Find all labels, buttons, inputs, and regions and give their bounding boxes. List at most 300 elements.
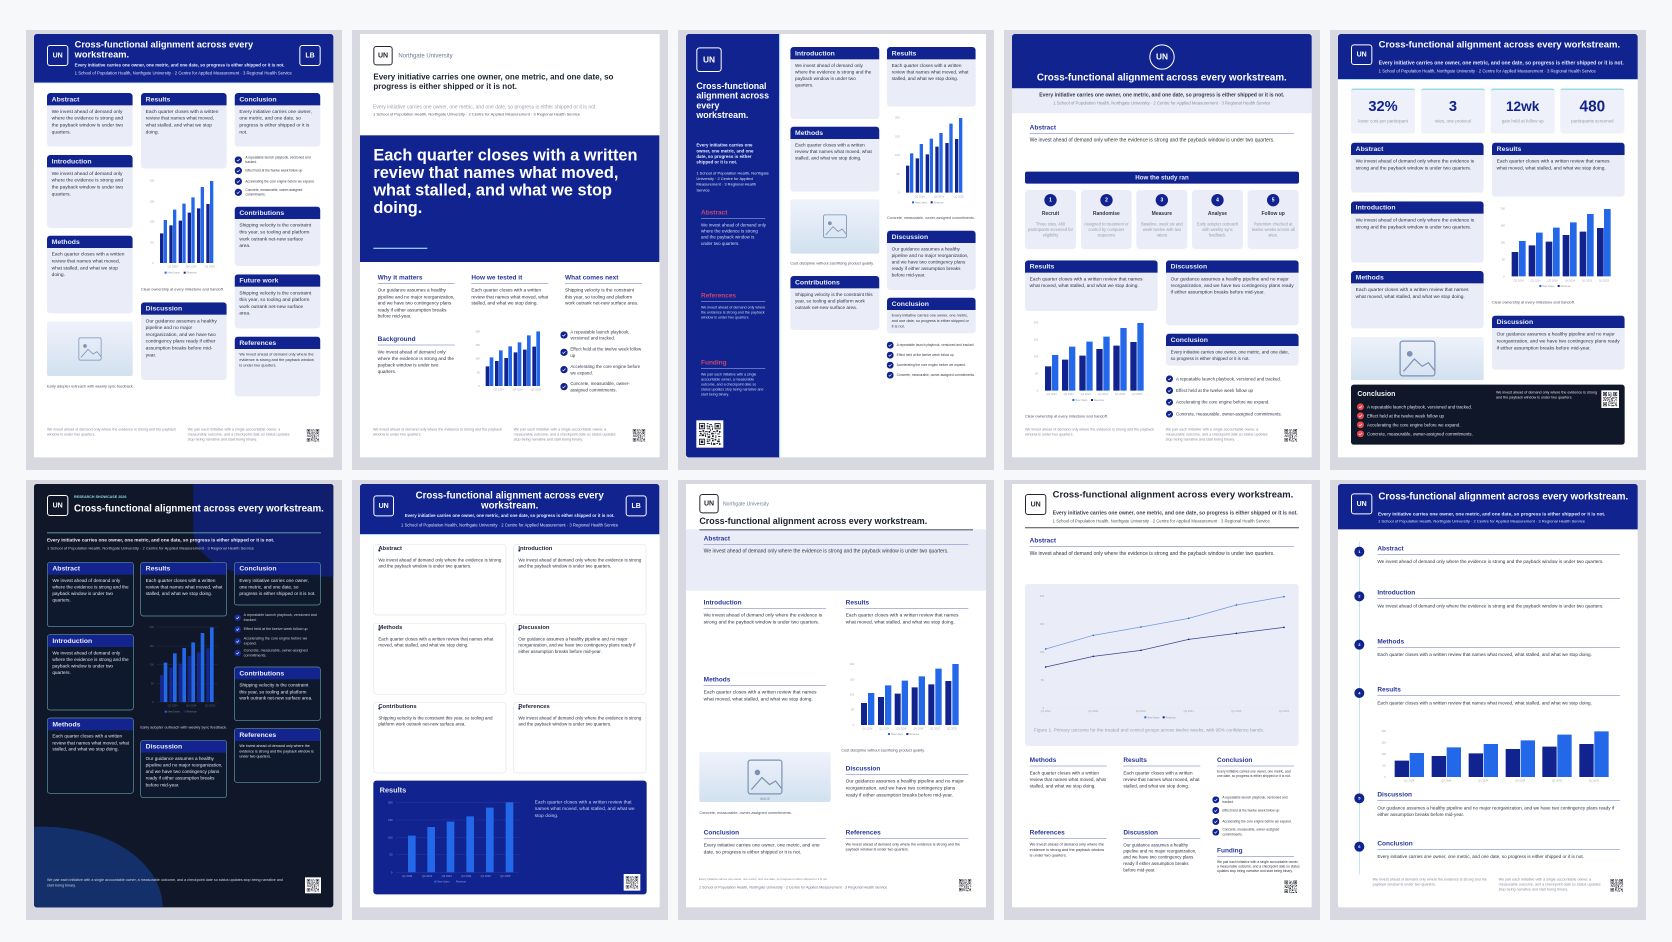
bar chart: Revenue bbox=[187, 711, 197, 714]
panel: Discussion: assumption breaks before mid- bbox=[146, 346, 212, 351]
section: Abstract: We invest ahead of demand only where the evidence is strong and the payback window is under two quarters. bbox=[1030, 551, 1275, 556]
checklist: Concrete, measurable, owner-assigned commitments. bbox=[1176, 411, 1282, 416]
panel: Discussion: Our guidance assumes a healthy bbox=[146, 318, 217, 324]
poster 3: navy sidebar bbox=[678, 30, 994, 470]
step 2: Randomise: Randomise bbox=[1093, 211, 1120, 216]
section: Background: quarters. bbox=[378, 369, 396, 374]
step 3: Measure: week twelve with two bbox=[1143, 227, 1181, 232]
section: Conclusion: Conclusion bbox=[1377, 840, 1413, 847]
section: Funding: accountable owner, a measurable bbox=[701, 377, 754, 381]
title: workstream. bbox=[696, 110, 748, 120]
bar chart: Q4 2024 bbox=[1565, 278, 1576, 282]
section: Discussion bbox=[846, 765, 968, 799]
poster 2: statement banner bbox=[352, 30, 668, 470]
caption: Clear ownership at every milestone and handoff. bbox=[1492, 300, 1575, 305]
section: What comes next: work outrank net-new surface area. bbox=[565, 300, 638, 306]
step 4: Analyse: 4 bbox=[1216, 197, 1219, 203]
section: How we tested it: review that names what moved, what bbox=[471, 294, 548, 299]
affiliations: 1 School of Population Health, Northgate University · 2 Centre for Applied Measurement · 3 Regional Health Service bbox=[47, 546, 254, 550]
logo UN bbox=[373, 495, 394, 516]
panel: Discussion: Our guidance assumes a healthy bbox=[892, 246, 960, 252]
checklist: Effect held at the twelve week follow up bbox=[897, 353, 954, 357]
bar chart: Revenue bbox=[1094, 399, 1105, 402]
header band bbox=[1338, 34, 1638, 80]
checklist: Accelerating the core engine before we bbox=[244, 636, 307, 640]
abstract band bbox=[686, 529, 986, 591]
bar chart: 0 bbox=[1503, 274, 1505, 278]
marker 4 bbox=[1354, 688, 1364, 698]
checklist: versioned and tracked. bbox=[570, 336, 615, 341]
section: Results bbox=[846, 599, 968, 627]
poster 1: three-column with twin logos bbox=[26, 30, 342, 470]
panel: Contributions: this year, so tooling and platform bbox=[239, 229, 309, 235]
panel: Methods: Methods bbox=[1356, 273, 1384, 281]
section: References: We invest ahead of demand only where the bbox=[1030, 842, 1104, 846]
panel: Discussion: pipeline and no major reorganization, bbox=[146, 762, 222, 768]
panel: Methods: what stalled, and what we stop bbox=[52, 265, 118, 271]
section: Discussion: pipeline and no major reorganization, bbox=[1123, 849, 1196, 854]
step 2: Randomise bbox=[1081, 190, 1132, 249]
checklist: Accelerating the core engine before we expand. bbox=[897, 363, 966, 367]
footer note bbox=[1496, 391, 1597, 400]
bar chart: 150 bbox=[475, 343, 480, 347]
panel: Discussion: ready if either assumption breaks bbox=[146, 775, 214, 781]
section: Discussion: ready if either assumption breaks bbox=[1123, 861, 1189, 866]
panel: Results: Each quarter closes with a written bbox=[146, 109, 218, 114]
round logo UN: UN bbox=[1156, 52, 1168, 61]
QR code bbox=[624, 874, 640, 891]
marker 1 bbox=[1354, 547, 1364, 557]
section: References bbox=[1030, 829, 1107, 859]
panel: Methods: Methods bbox=[52, 720, 80, 728]
logo UN: UN bbox=[703, 55, 715, 64]
headline: progress is either shipped or it is not. bbox=[373, 82, 517, 91]
panel: Abstract: and the payback window is under two quarters. bbox=[378, 564, 471, 569]
line chart: 150 bbox=[1040, 622, 1045, 626]
bar chart: 50 bbox=[477, 371, 480, 375]
section: References bbox=[701, 292, 766, 320]
bar chart bbox=[895, 115, 964, 204]
QR code bbox=[1284, 429, 1297, 442]
section: Discussion: Our guidance assumes a healthy bbox=[1123, 842, 1188, 847]
heading: Results: Results bbox=[380, 786, 406, 794]
QR code bbox=[696, 420, 723, 448]
panel: Contributions: Contributions bbox=[378, 703, 417, 709]
subtitle: Every initiative carries one owner, one metric, and one date, so progress is either shipped or it is not. bbox=[1378, 512, 1605, 517]
section: Abstract bbox=[1030, 124, 1294, 143]
title: workstream. bbox=[481, 500, 538, 511]
title: Cross-functional bbox=[696, 81, 767, 91]
title: Cross-functional alignment across every workstream. bbox=[699, 516, 927, 526]
panel: Conclusion: Conclusion bbox=[239, 95, 277, 103]
section: References: evidence is strong and the payback window bbox=[1030, 847, 1104, 852]
step 5: Follow up: twelve weeks across all bbox=[1252, 227, 1295, 232]
section: References: References bbox=[1030, 829, 1065, 836]
marker 3 bbox=[1354, 640, 1364, 650]
step 3: Measure bbox=[1136, 190, 1187, 249]
stat: 32%: 32% bbox=[1368, 98, 1398, 114]
bar chart bbox=[1034, 321, 1144, 402]
round logo UN bbox=[1149, 44, 1175, 70]
poster 10: numbered timeline bbox=[1330, 480, 1646, 920]
subtitle: Every initiative carries one owner, one metric, and one date, so progress is either shipped or it is not. bbox=[405, 513, 615, 518]
panel: Introduction: Introduction bbox=[52, 157, 92, 165]
footer note right: We pair each initiative with a single accountable owner, a bbox=[1499, 878, 1591, 882]
bar chart: 0 bbox=[1384, 775, 1386, 779]
panel: Contributions bbox=[790, 276, 879, 330]
title: Cross-functional alignment across every workstream. bbox=[1379, 39, 1620, 50]
panel: Discussion: Discussion bbox=[1497, 318, 1533, 326]
affiliations: 1 School of Population Health, Northgate University · 2 Centre for Applied Measurement · 3 Regional Health Service bbox=[1053, 101, 1270, 106]
footer note left bbox=[1373, 877, 1487, 887]
section: Why it matters: ready if either assumption breaks bbox=[378, 307, 446, 312]
section: Results: Each quarter closes with a written bbox=[1123, 770, 1193, 775]
panel: Contributions: outrank net-new surface area. bbox=[795, 305, 857, 310]
panel: Discussion: reorganization, and we have two contingency plans ready if bbox=[518, 643, 635, 648]
section: Abstract: Abstract bbox=[1030, 124, 1056, 131]
stat: 32% bbox=[1351, 88, 1415, 133]
bar chart: Q2 2024 bbox=[168, 703, 178, 707]
bar chart: Q3 2024 bbox=[1478, 779, 1489, 783]
banner statement: review that names what moved, bbox=[373, 163, 618, 181]
section: Why it matters: and we have two contingency plans bbox=[378, 300, 451, 306]
checklist: Accelerating the core engine before we expand. bbox=[1222, 820, 1292, 823]
panel: Results bbox=[141, 93, 227, 169]
section: Introduction bbox=[1377, 589, 1620, 609]
section: Why it matters: Our guidance assumes a healthy bbox=[378, 287, 446, 293]
poster 8: tinted abstract band bbox=[678, 480, 994, 920]
bar chart: 100 bbox=[150, 220, 155, 224]
panel: Introduction: strong and the payback window is under two quarters. bbox=[1356, 224, 1471, 230]
panel: Contributions: Shipping velocity is the constraint this bbox=[795, 292, 873, 297]
panel: References: and the payback window is under two quarters. bbox=[518, 722, 611, 727]
footer note right: We pair each initiative with a single accountable owner, a bbox=[514, 428, 606, 432]
panel: Future work: Future work bbox=[239, 277, 278, 284]
subtitle: Every initiative carries one owner, one metric, and one date, so progress is either shipped or it is not. bbox=[47, 538, 274, 543]
bar chart: 0 bbox=[152, 261, 154, 265]
logo UN bbox=[1351, 493, 1372, 514]
bar chart: 0 bbox=[478, 384, 480, 388]
section: Abstract: Abstract bbox=[704, 535, 730, 542]
marker 2: 2 bbox=[1358, 594, 1360, 599]
checklist: assigned commitments. bbox=[570, 387, 617, 392]
stat: 12wk: 12wk bbox=[1506, 99, 1539, 114]
logo LB: LB bbox=[305, 51, 315, 59]
checklist: Effect held at the twelve week follow up bbox=[244, 627, 308, 631]
panel: Abstract: where the evidence is strong and bbox=[52, 116, 123, 121]
bar chart: 100 bbox=[1034, 355, 1039, 359]
panel: Methods: stalled, and what we stop doing. bbox=[795, 155, 861, 161]
checklist: Accelerating the core engine before we expand. bbox=[1176, 399, 1270, 404]
rule bbox=[47, 531, 321, 534]
checklist: tracked. bbox=[1222, 800, 1234, 804]
section: Methods bbox=[1377, 638, 1620, 658]
section: How we tested it: Each quarter closes with a written bbox=[471, 287, 541, 293]
panel: Results: what moved, what stalled, and what we stop doing. bbox=[1030, 283, 1139, 288]
logo UN bbox=[1351, 44, 1372, 65]
title: workstream. bbox=[75, 49, 129, 59]
line chart: 0 bbox=[1043, 706, 1045, 710]
bar chart: 100 bbox=[1381, 752, 1386, 756]
logo UN: UN bbox=[1357, 51, 1367, 58]
footer note left bbox=[1025, 428, 1154, 437]
section: Results: Results bbox=[1123, 756, 1147, 764]
panel: Contributions bbox=[234, 667, 321, 721]
QR code bbox=[1601, 390, 1619, 408]
bar chart: Q2 2025 bbox=[500, 874, 511, 878]
section: Discussion: Our guidance assumes a healthy pipeline and no major reorganization, and we have two contingency plans ready if bbox=[1377, 805, 1614, 810]
panel: Discussion: reorganization, and we have two bbox=[146, 332, 216, 337]
bar chart: Q2 2025 bbox=[205, 265, 215, 269]
title: Cross-functional alignment across every bbox=[416, 490, 604, 501]
footer note left bbox=[47, 428, 176, 437]
subtitle: Every initiative carries one bbox=[696, 142, 753, 147]
section: Results: review that names what moved, what bbox=[1123, 777, 1200, 782]
banner statement: doing. bbox=[373, 198, 422, 216]
marker 1: 1 bbox=[1358, 549, 1360, 554]
affiliations: 1 School of Population Health, Northgate University · 2 Centre for Applied Measurement · 3 Regional Health Service bbox=[699, 885, 887, 889]
section: Methods: Methods bbox=[704, 676, 730, 683]
QR code bbox=[959, 879, 971, 891]
section: Funding: status updates stop being narrative and bbox=[701, 388, 763, 392]
bar chart: 150 bbox=[850, 677, 855, 681]
caption: Concrete, measurable, owner-assigned commitments. bbox=[699, 811, 792, 815]
step 1: Recruit: Three sites, 480 bbox=[1036, 222, 1065, 226]
bar chart bbox=[1379, 728, 1613, 783]
panel: References bbox=[513, 702, 646, 773]
panel: Introduction: and the payback window is under two quarters. bbox=[518, 564, 611, 569]
logo UN bbox=[696, 47, 722, 72]
bar chart: Q1 2024 bbox=[1514, 278, 1524, 282]
panel: Abstract: We invest ahead of demand only bbox=[52, 109, 122, 114]
panel: Discussion bbox=[887, 231, 976, 290]
panel: Discussion: contingency plans ready if either bbox=[146, 339, 215, 344]
bar chart: 0 bbox=[391, 870, 393, 874]
bar chart: Q3 2024 bbox=[1081, 392, 1091, 396]
footer note left: We invest ahead of demand only where the evidence is strong and the payback bbox=[373, 428, 502, 432]
panel: Introduction: where the evidence is strong and bbox=[52, 178, 123, 183]
section: Funding: We pair each initiative with a single accountable owner, bbox=[1217, 860, 1298, 864]
marker 6: 6 bbox=[1358, 844, 1360, 849]
bar chart: 0 bbox=[853, 723, 855, 727]
panel: Abstract: quarters. bbox=[52, 597, 71, 603]
logo UN: UN bbox=[53, 51, 63, 59]
panel: Discussion: pipeline and no major bbox=[146, 325, 192, 330]
bar chart: Q4 2024 bbox=[1515, 779, 1526, 783]
subtitle strip bbox=[1012, 88, 1312, 113]
results text bbox=[534, 799, 635, 818]
panel: Methods: what moved, what stalled, and what we stop doing. bbox=[1356, 294, 1465, 299]
bar chart: Q2 2024 bbox=[422, 874, 433, 878]
step 1: Recruit: Recruit bbox=[1042, 211, 1059, 216]
bar chart: Revenue bbox=[1561, 285, 1571, 288]
section: Conclusion: date, so progress is either shipped or it is not. bbox=[704, 850, 801, 855]
header band bbox=[34, 34, 333, 83]
panel: Abstract: We invest ahead of demand only where the evidence is bbox=[1356, 159, 1474, 164]
checklist: A repeatable launch playbook, versioned and tracked. bbox=[1367, 404, 1472, 409]
footer note: We pair each initiative with a single accountable owner, a measurable outcome, and a checkpoint date so status updates stop being narrative and bbox=[47, 878, 283, 882]
panel: Abstract: We invest ahead of demand only bbox=[52, 578, 120, 583]
panel: Conclusion (dark) bbox=[1351, 385, 1625, 445]
panel: Discussion: year. bbox=[146, 352, 156, 358]
title: every bbox=[696, 100, 719, 110]
poster 6: dark theme bbox=[26, 480, 342, 920]
section: Conclusion: Every initiative carries one owner, one metric, and one date, so progress is either shipped or it is not. bbox=[1377, 854, 1584, 859]
panel: Discussion: pipeline and no major reorganization, bbox=[892, 253, 968, 258]
panel: Discussion: Discussion bbox=[518, 624, 549, 630]
bar chart: 200 bbox=[475, 329, 480, 333]
title: Cross-functional alignment across every bbox=[75, 39, 253, 50]
section: What comes next: this year, so tooling and platform bbox=[565, 294, 632, 299]
logo UN: UN bbox=[1357, 500, 1367, 507]
checklist: A repeatable launch playbook, versioned and bbox=[245, 156, 311, 160]
bar chart: 200 bbox=[1500, 207, 1505, 211]
affiliations: 1 School of Population Health, Northgate University · 2 Centre for Applied Measurement · 3 Regional Health Service bbox=[1379, 69, 1596, 73]
section: Methods: what moved, what stalled, and what we stop doing. bbox=[704, 697, 813, 702]
headline: Every initiative carries one owner, one metric, and one date, so bbox=[373, 73, 613, 82]
bar chart: Q2 2025 bbox=[947, 726, 958, 730]
panel: References: We invest ahead of demand only where the bbox=[239, 744, 310, 748]
panel: Abstract: strong and the payback window is under two quarters. bbox=[1356, 166, 1471, 171]
affiliations bbox=[696, 170, 769, 192]
panel: Contributions: Contributions bbox=[239, 209, 284, 217]
step 5: Follow up: Retention checked at bbox=[1254, 222, 1292, 226]
bar chart: 50 bbox=[851, 708, 855, 712]
bar chart: 0 bbox=[898, 191, 900, 195]
section: Discussion: Discussion bbox=[1123, 829, 1158, 836]
section: Discussion: ready if either assumption breaks before mid-year. bbox=[846, 792, 953, 798]
bar chart: Revenue bbox=[187, 272, 197, 275]
institution name: Northgate University bbox=[398, 52, 453, 59]
title bbox=[74, 39, 254, 59]
panel: Methods: Each quarter closes with a written review that names bbox=[1356, 287, 1468, 292]
panel: Introduction bbox=[790, 47, 879, 119]
panel: References: is under two quarters. bbox=[239, 363, 276, 368]
section: Discussion: Discussion bbox=[846, 765, 880, 772]
panel: Conclusion bbox=[235, 93, 320, 147]
panel: References bbox=[235, 337, 320, 396]
panel: Methods: Each quarter closes with a written bbox=[795, 142, 865, 148]
headline bbox=[373, 73, 614, 91]
panel: Discussion: and we have two contingency plans bbox=[892, 259, 965, 265]
section: Abstract: under two quarters. bbox=[701, 241, 739, 246]
panel: Conclusion: one metric, and one date, so bbox=[239, 584, 298, 590]
panel: References bbox=[234, 728, 321, 783]
step 4: Analyse: with weekly sync bbox=[1202, 227, 1233, 232]
bar chart: New Users bbox=[1542, 285, 1555, 288]
panel: Introduction: payback window is under two bbox=[795, 76, 856, 81]
affiliations: 1 School of Population Health, Northgate University · 2 Centre for Applied Measurement · 3 Regional Health Service bbox=[1053, 519, 1270, 523]
section: Funding: We pair each initiative with a single bbox=[701, 372, 756, 376]
timeline spine bbox=[1358, 542, 1361, 874]
panel: Methods: Each quarter closes with a written bbox=[52, 252, 124, 257]
bar chart: Q2 2025 bbox=[1589, 779, 1600, 783]
panel: Introduction: the payback window is under two bbox=[52, 185, 123, 190]
checklist bbox=[886, 342, 975, 378]
bar chart bbox=[475, 329, 542, 392]
step 4: Analyse: Analyse bbox=[1208, 211, 1227, 216]
panel: Abstract bbox=[47, 93, 133, 147]
checklist bbox=[234, 613, 317, 657]
stat: 480 bbox=[1560, 88, 1624, 133]
section: Discussion: before mid-year. bbox=[1123, 867, 1155, 872]
marker 5: 5 bbox=[1358, 796, 1360, 801]
footer note left: payback window is under two quarters. bbox=[1373, 883, 1436, 887]
panel: Conclusion: Conclusion bbox=[1171, 336, 1208, 344]
panel: Abstract: Abstract bbox=[1356, 145, 1383, 153]
panel: References: under two quarters. bbox=[239, 754, 271, 758]
section: Methods: Methods bbox=[1377, 638, 1404, 645]
section: Methods: review that names what moved, what bbox=[1030, 777, 1106, 782]
panel: Conclusion bbox=[1166, 334, 1299, 366]
panel: Results: review that names what moved, what bbox=[892, 69, 968, 74]
header band bbox=[1012, 34, 1312, 88]
step 3: Measure: 3 bbox=[1160, 197, 1163, 203]
panel: Future work: this year, so tooling and platform bbox=[239, 297, 309, 302]
panel: Results: Results bbox=[1497, 145, 1521, 153]
panel: Future work bbox=[235, 274, 320, 328]
panel: Conclusion: Conclusion bbox=[892, 300, 929, 308]
subtitle: Every initiative carries one owner, one metric, and one date, so progress is either shipped or it is not. bbox=[1053, 510, 1298, 516]
checklist: Effect held at the twelve week follow up bbox=[1176, 388, 1253, 393]
bar chart: New Users bbox=[437, 881, 450, 884]
bar chart: Q3 2024 bbox=[896, 726, 907, 730]
panel: Methods: stalled, and what we stop doing. bbox=[52, 746, 119, 752]
section: Methods: stalled, and what we stop doing. bbox=[1030, 783, 1096, 789]
section: Background: payback window is under two bbox=[378, 362, 438, 367]
line chart: New Users bbox=[1147, 716, 1160, 719]
bar chart: 100 bbox=[850, 692, 855, 696]
process heading bar: How the study ran bbox=[1135, 174, 1189, 181]
panel: Results: Each quarter closes with a written bbox=[892, 63, 961, 68]
footer note left: window is under two quarters. bbox=[1025, 433, 1074, 437]
section: Abstract bbox=[701, 209, 766, 246]
panel: Conclusion: Every initiative carries one owner, one metric, bbox=[892, 313, 968, 317]
checklist: Concrete, measurable, owner-assigned bbox=[245, 188, 302, 192]
checklist bbox=[560, 329, 642, 392]
section: Funding bbox=[1217, 847, 1294, 874]
step 4: Analyse: Early adopter outreach bbox=[1197, 222, 1238, 226]
panel: Methods: Each quarter closes with a written review that names what bbox=[378, 636, 493, 641]
section: Introduction: Introduction bbox=[1377, 589, 1415, 596]
line chart: Q1 2025 bbox=[1231, 709, 1242, 713]
bar chart: Q1 2024 bbox=[1047, 392, 1057, 396]
checklist: A repeatable launch playbook, versioned and tracked. bbox=[1176, 376, 1281, 381]
affiliations: Measurement · 3 Regional Health bbox=[696, 182, 756, 187]
section: Results: stalled, and what we stop doing. bbox=[1123, 783, 1189, 789]
panel: Discussion: and we have two contingency plans bbox=[146, 769, 219, 774]
bar chart: 100 bbox=[388, 835, 393, 839]
section: Conclusion: Conclusion bbox=[1217, 756, 1252, 764]
caption: Cost discipline without sacrificing product quality. bbox=[790, 261, 874, 265]
section: Abstract: We invest ahead of demand only where the evidence is strong and the payback window is under two quarters. bbox=[1377, 559, 1603, 564]
panel: Discussion: reorganization, and we have two contingency plans ready bbox=[1497, 339, 1620, 344]
section: Introduction: We invest ahead of demand only where the evidence is strong and the payback window is under two quarters. bbox=[1377, 603, 1603, 608]
panel: Methods bbox=[47, 718, 134, 794]
step 3: Measure: Measure bbox=[1152, 211, 1172, 216]
logo UN bbox=[1025, 494, 1046, 515]
bar chart: Q1 2025 bbox=[1115, 392, 1126, 396]
footer note right: We pair each initiative with a single accountable owner, a bbox=[1166, 428, 1258, 432]
panel: Results bbox=[1025, 260, 1158, 311]
stat: 3: sites, one protocol bbox=[1435, 118, 1471, 123]
section: Methods: Each quarter closes with a written review that names what moved, what stalled, and what we stop doing. bbox=[1377, 652, 1592, 657]
header band bbox=[1338, 484, 1638, 529]
section: Funding: updates stop being narrative and start being binary. bbox=[1217, 869, 1293, 873]
logo UN: UN bbox=[378, 52, 388, 59]
section: References: We invest ahead of demand only where the evidence is strong and the bbox=[846, 842, 960, 846]
subtitle: shipped or it is not. bbox=[696, 159, 737, 164]
